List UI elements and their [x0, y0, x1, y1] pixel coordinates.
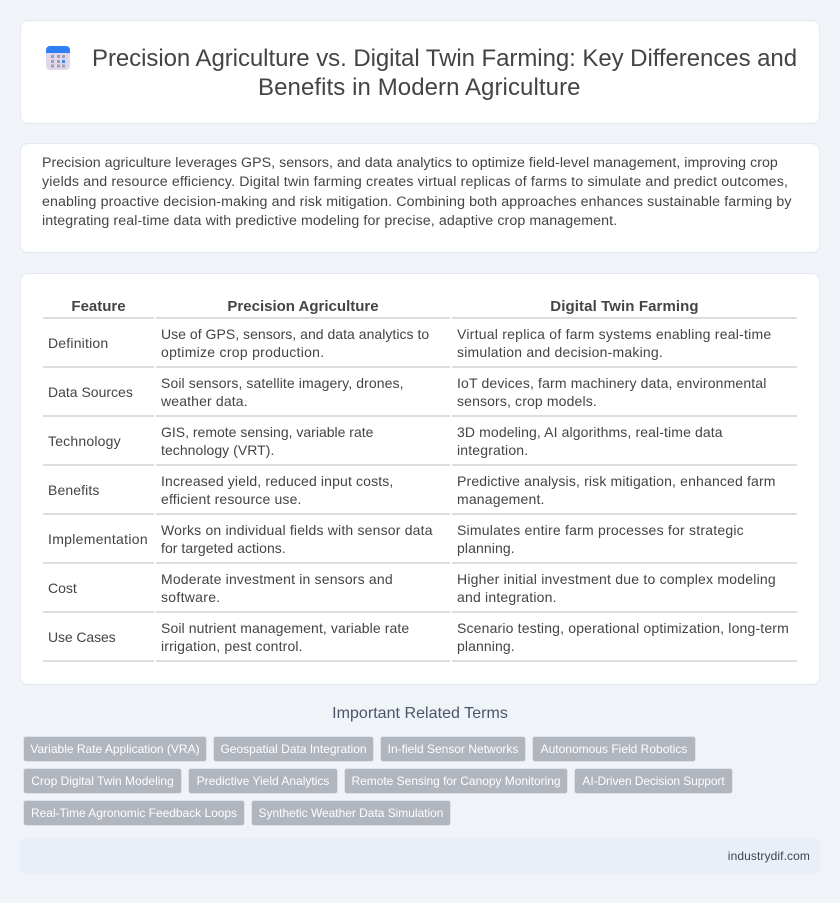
- cell: Digital Twin data sources: sensors, crop models.: [457, 393, 597, 409]
- cell: Digital Twin technology: 3D modeling, AI algorithms, real-time data: [457, 424, 723, 440]
- row label: Technology: Technology: [48, 433, 121, 449]
- row label: Cost: Cost: [48, 580, 77, 596]
- tag: Geospatial Data Integration: [213, 736, 374, 762]
- title: Precision Agriculture vs. Digital Twin Farming: Key Differences and: [92, 45, 797, 72]
- cell: Digital Twin benefits: management.: [457, 491, 545, 507]
- tag: AI-Driven Decision Support: [574, 768, 733, 794]
- tag: Variable Rate Application: Variable Rate Application (VRA): [30, 742, 200, 756]
- tag: Remote Sensing for Canopy Monitoring: Remote Sensing for Canopy Monitoring: [351, 774, 561, 788]
- tag: In-field Sensor Networks: In-field Sensor Networks: [388, 742, 518, 756]
- cell: Precision Agriculture data sources: [161, 375, 404, 409]
- cell: Precision Agriculture benefits: [161, 473, 393, 507]
- tag: AI-Driven Decision Support: AI-Driven Decision Support: [582, 774, 725, 788]
- tag: Geospatial Data Integration: Geospatial Data Integration: [220, 742, 367, 756]
- heading: Precision Agriculture column: Precision Agriculture: [227, 298, 379, 315]
- tag: Synthetic Weather Data Simulation: [251, 800, 451, 826]
- row label: Use Cases: Use Cases: [48, 629, 116, 645]
- tag: Remote Sensing for Canopy Monitoring: [344, 768, 568, 794]
- tag: Variable Rate Application: [23, 736, 207, 762]
- title: [92, 45, 797, 101]
- heading: Feature column: Feature: [71, 298, 126, 315]
- row label: Benefits: Benefits: [48, 482, 100, 498]
- cell: Digital Twin technology: integration.: [457, 442, 528, 458]
- cell: Precision Agriculture cost: [161, 571, 393, 605]
- cell: Digital Twin definition: Virtual replica of farm systems enabling real-time: [457, 326, 771, 342]
- cell: Precision Agriculture implementation: for targeted actions.: [161, 540, 286, 556]
- tag: Real-Time Agronomic Feedback Loops: [23, 800, 245, 826]
- text block: introduction: Precision agriculture leverages GPS, sensors, and data analytics to optimize field-level management, improving crop: [42, 155, 778, 171]
- panel: introduction card: [20, 143, 820, 253]
- cell: Digital Twin data sources: IoT devices, farm machinery data, environmental: [457, 375, 766, 391]
- cell: Precision Agriculture cost: software.: [161, 589, 220, 605]
- cell: Digital Twin benefits: Predictive analysis, risk mitigation, enhanced farm: [457, 473, 776, 489]
- cell: Digital Twin technology: [457, 424, 723, 458]
- text block: introduction: yields and resource efficiency. Digital twin farming creates virtual replicas of farms to simulate and predict outcomes,: [42, 174, 788, 190]
- cell: Precision Agriculture definition: optimize crop production.: [161, 344, 324, 360]
- cell: Precision Agriculture definition: [161, 326, 429, 360]
- cell: Precision Agriculture use cases: Soil nutrient management, variable rate: [161, 620, 409, 636]
- cell: Digital Twin use cases: planning.: [457, 638, 515, 654]
- cell: Digital Twin use cases: [457, 620, 789, 654]
- tag: Crop Digital Twin Modeling: [23, 768, 182, 794]
- tag: Predictive Yield Analytics: [188, 768, 338, 794]
- footer bar: [20, 839, 820, 873]
- cell: Precision Agriculture data sources: Soil sensors, satellite imagery, drones,: [161, 375, 404, 391]
- tag: Synthetic Weather Data Simulation: Synthetic Weather Data Simulation: [259, 806, 443, 820]
- row label: Definition: Definition: [48, 335, 108, 351]
- cell: Digital Twin data sources: [457, 375, 766, 409]
- heading: Important Related Terms: Important Related Terms: [332, 705, 508, 722]
- cell: Precision Agriculture data sources: weather data.: [161, 393, 248, 409]
- cell: Digital Twin cost: and integration.: [457, 589, 557, 605]
- cell: Precision Agriculture technology: GIS, remote sensing, variable rate: [161, 424, 373, 440]
- tag: Crop Digital Twin Modeling: Crop Digital Twin Modeling: [31, 774, 174, 788]
- title: Benefits in Modern Agriculture: [258, 74, 581, 101]
- cell: Precision Agriculture implementation: Works on individual fields with sensor data: [161, 522, 433, 538]
- text block: introduction: enabling proactive decision-making and risk mitigation. Combining both approaches enhances sustainable farming by: [42, 194, 792, 210]
- text block: introduction: integrating real-time data with predictive modeling for precise, adaptive crop management.: [42, 213, 617, 229]
- tag: Real-Time Agronomic Feedback Loops: Real-Time Agronomic Feedback Loops: [31, 806, 237, 820]
- row label: Data Sources: Data Sources: [48, 384, 133, 400]
- cell: Precision Agriculture benefits: efficient resource use.: [161, 491, 302, 507]
- cell: Digital Twin implementation: [457, 522, 744, 556]
- heading: Digital Twin Farming column: Digital Twin Farming: [550, 298, 699, 315]
- cell: Precision Agriculture use cases: irrigation, pest control.: [161, 638, 303, 654]
- cell: Precision Agriculture cost: Moderate investment in sensors and: [161, 571, 393, 587]
- cell: Digital Twin implementation: Simulates entire farm processes for strategic: [457, 522, 744, 538]
- cell: Digital Twin definition: simulation and decision-making.: [457, 344, 663, 360]
- tag: In-field Sensor Networks: [380, 736, 526, 762]
- tag: Autonomous Field Robotics: [532, 736, 696, 762]
- cell: Precision Agriculture definition: Use of GPS, sensors, and data analytics to: [161, 326, 429, 342]
- icon: calendar: [46, 46, 70, 70]
- panel: comparison table: [20, 273, 820, 685]
- cell: Digital Twin implementation: planning.: [457, 540, 515, 556]
- cell: Precision Agriculture technology: [161, 424, 373, 458]
- cell: Digital Twin cost: Higher initial investment due to complex modeling: [457, 571, 776, 587]
- cell: Precision Agriculture use cases: [161, 620, 409, 654]
- cell: Precision Agriculture implementation: [161, 522, 433, 556]
- tag: Predictive Yield Analytics: Predictive Yield Analytics: [197, 774, 329, 788]
- footer bar: industrydif.com: [728, 849, 810, 863]
- cell: Precision Agriculture benefits: Increased yield, reduced input costs,: [161, 473, 393, 489]
- cell: Digital Twin use cases: Scenario testing, operational optimization, long-term: [457, 620, 789, 636]
- cell: Digital Twin definition: [457, 326, 771, 360]
- text block: introduction: [42, 155, 792, 229]
- tag: Autonomous Field Robotics: Autonomous Field Robotics: [541, 742, 687, 756]
- cell: Precision Agriculture technology: technology (VRT).: [161, 442, 274, 458]
- panel: title card: [20, 20, 820, 124]
- row label: Implementation: Implementation: [48, 531, 148, 547]
- cell: Digital Twin cost: [457, 571, 776, 605]
- cell: Digital Twin benefits: [457, 473, 776, 507]
